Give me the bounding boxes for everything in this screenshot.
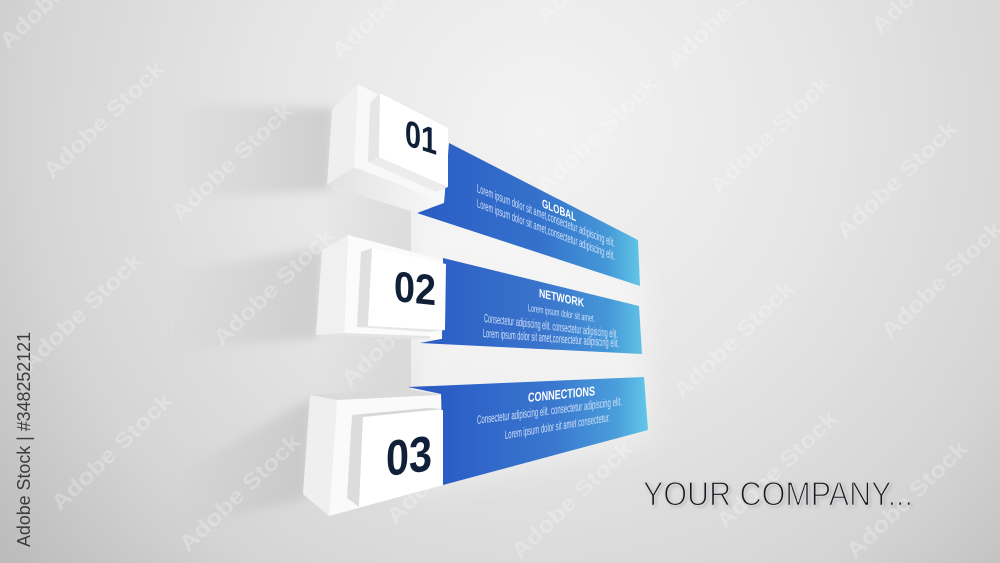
box: 01	[327, 84, 448, 213]
watermark: Adobe Stock	[506, 435, 638, 563]
cast shadows	[170, 104, 411, 530]
banner: global	[417, 143, 640, 286]
stock id label: Adobe Stock | #348252121	[14, 332, 34, 547]
box: 03	[303, 389, 443, 516]
watermark: Adobe Stock	[16, 247, 148, 376]
number: 03: 03	[386, 425, 432, 487]
panel: 01 global: Lorem ipsum dolor sit amet,consectetur adipiscing elit.	[477, 181, 615, 250]
watermark: Adobe Stock	[46, 387, 178, 516]
number: 01: 01	[405, 113, 437, 164]
text: global body	[477, 181, 615, 263]
panel: 02 network: Consectetur adipiscing elit. consectetur adipiscing elit.	[484, 311, 618, 341]
watermark: Adobe Stock	[38, 55, 170, 184]
heading: global: GLOBAL	[542, 196, 576, 224]
box: 02	[316, 235, 446, 339]
watermark: Adobe Stock	[208, 222, 340, 351]
tagline: your company: YOUR COMPANY...	[645, 477, 915, 515]
heading: network: NETWORK	[539, 286, 584, 310]
light wash behind banners	[412, 195, 650, 490]
text: network body	[483, 303, 619, 350]
watermark: Adobe Stock	[166, 97, 298, 226]
panel: 02 network	[316, 235, 642, 354]
heading: connections: CONNECTIONS	[528, 383, 595, 405]
text: connections body: Consectetur adipiscing elit. consectetur adipiscing elit.	[477, 394, 622, 427]
text: connections body	[477, 394, 622, 442]
panel: 01 global: Lorem ipsum dolor sit amet,consectetur adipiscing elit.	[477, 196, 615, 263]
watermark: Adobe Stock	[174, 428, 306, 557]
watermark: Adobe Stock	[704, 70, 836, 199]
watermark: Adobe Stock	[876, 215, 1000, 344]
text: network body: Lorem ipsum dolor sit amet.	[528, 303, 595, 325]
panel: 03 connections	[303, 377, 648, 516]
text: connections body: Lorem ipsum dolor sit amet consectetur.	[505, 410, 610, 442]
panel: 02 network: Lorem ipsum dolor sit amet,consectetur adipiscing elit.	[483, 326, 619, 350]
panel: 01 global	[327, 84, 640, 286]
watermark: Adobe Stock	[381, 400, 513, 529]
watermark: Adobe Stock	[668, 275, 800, 404]
watermark: Adobe Stock	[531, 70, 663, 199]
banner: network	[420, 258, 642, 354]
watermark: Adobe Stock	[711, 405, 843, 534]
watermark: Adobe Stock	[841, 435, 973, 563]
tagline: your company: YOUR COMPANY...	[643, 476, 913, 514]
number: 02: 02	[394, 263, 436, 315]
watermark: Adobe Stock	[831, 115, 963, 244]
banner: connections	[408, 377, 648, 485]
watermark: Adobe Stock	[336, 263, 468, 392]
